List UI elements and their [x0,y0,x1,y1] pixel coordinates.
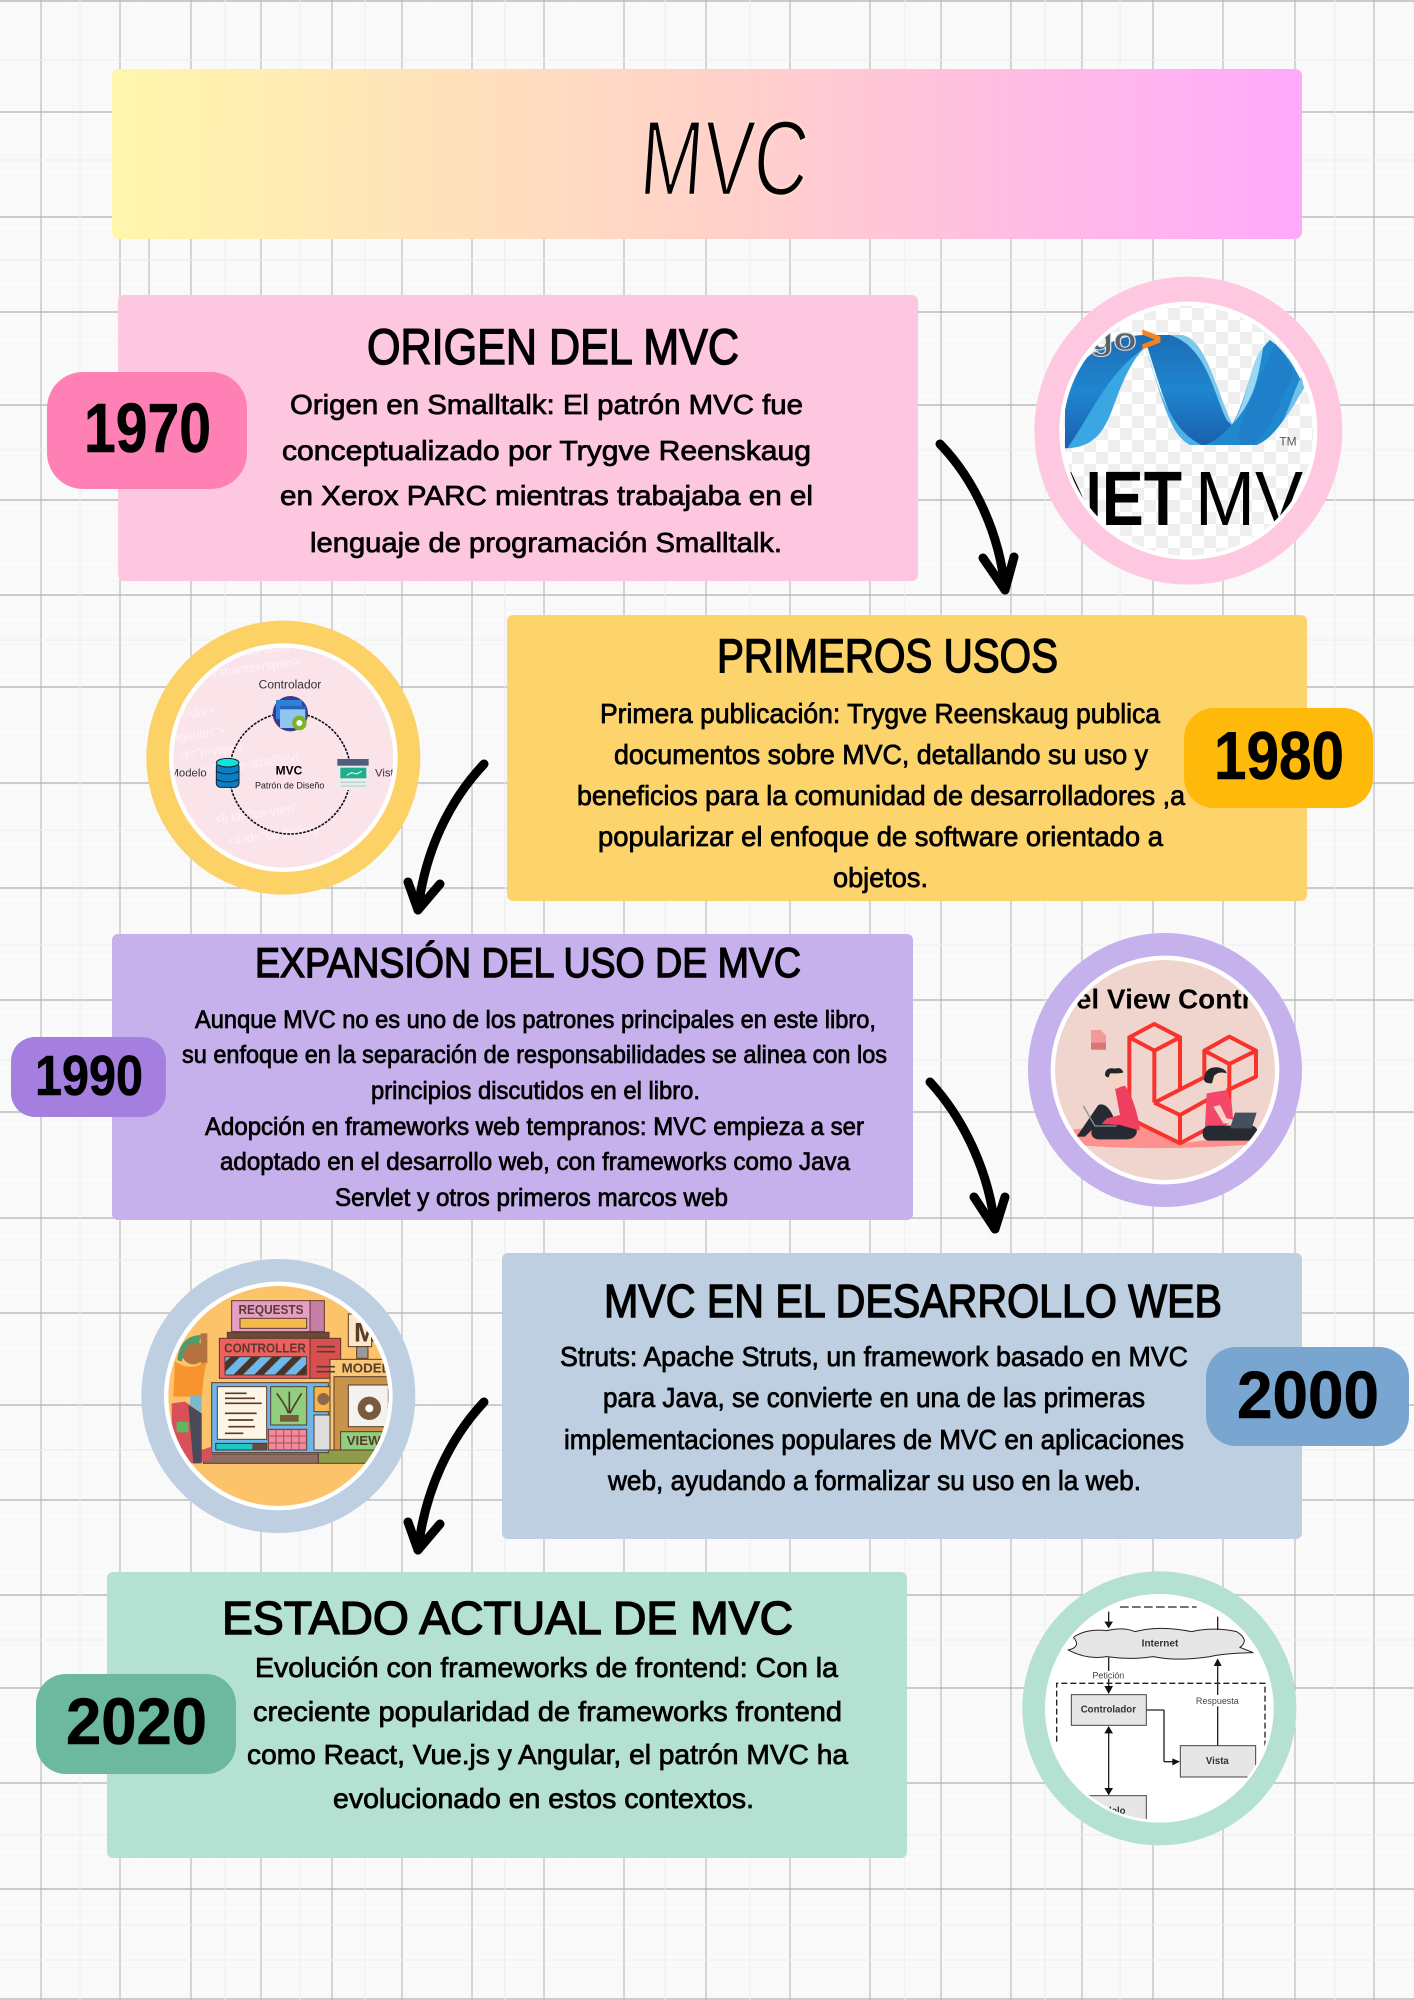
title text: MVC [636,98,813,218]
body text: estado actual: como React, Vue.js y Angular, el patrón MVC ha [247,1739,848,1770]
heading: origen: ORIGEN DEL MVC [367,319,739,375]
body text: desarrollo web: Struts: Apache Struts, un framework basado en MVC [560,1341,1188,1372]
year badge: 1970: 1970 [84,389,211,467]
icon: controller [273,696,308,731]
image: web MVC flow diagram: Internet [1142,1638,1179,1649]
body text: estado actual: Evolución con frameworks de frontend: Con la [255,1652,838,1683]
image: MVC cycle diagram: <li id="ca-history [227,821,322,848]
body text: estado actual: creciente popularidad de frameworks frontend [253,1696,842,1727]
icon: laravel logo [1129,1024,1256,1143]
body text: origen: Origen en Smalltalk: El patrón MVC fue [290,389,803,420]
image: MVC cycle diagram: Patrón de Diseño [255,780,324,790]
image: Laravel MVC illustration: Model View Controller [1018,983,1312,1014]
body text: primeros usos: documentos sobre MVC, detallando su uso y [614,739,1148,770]
icon: database [216,758,239,787]
image: requests controller model view machine: M [354,1318,376,1348]
image: requests controller model view machine: REQUESTS [238,1302,304,1317]
year badge: 2000 [1206,1347,1409,1446]
body text: estado actual: evolucionado en estos contextos. [333,1783,754,1814]
body text: origen: en Xerox PARC mientras trabajaba en el [280,480,813,511]
image: web MVC flow diagram [1022,1571,1296,1845]
heading: estado actual: ESTADO ACTUAL DE MVC [222,1592,793,1644]
image: requests controller model view machine: VIEW [347,1433,381,1448]
image: .NET MVC logo: go [1090,321,1137,357]
body text: desarrollo web [560,1341,1188,1496]
body text: desarrollo web: web, ayudando a formalizar su uso en la web. [607,1465,1141,1496]
body text: primeros usos: objetos. [833,862,928,893]
person: man with laptop [1077,1068,1140,1139]
image: MVC cycle diagram: Vista [375,768,401,780]
arrow: 2000 to 2020 [408,1402,484,1550]
body text: origen: conceptualizado por Trygve Reenskaug [282,435,811,466]
image: MVC cycle diagram: Controlador [259,678,321,692]
image: MVC cycle diagram [146,621,420,895]
heading: expansion: EXPANSIÓN DEL USO DE MVC [255,939,801,986]
person with blocks [172,1333,212,1463]
body text: estado actual [247,1652,848,1814]
year badge: 2020 [36,1674,236,1774]
body text: desarrollo web: para Java, se convierte en una de las primeras [603,1382,1145,1413]
icon: view window [337,759,369,790]
year badge: 1990 [11,1037,166,1117]
body text: expansion: Aunque MVC no es uno de los patrones principales en este libro, [195,1006,876,1034]
body text: primeros usos [577,698,1185,893]
image: MVC cycle diagram: <li id="ca-view" [214,801,300,826]
body text: origen: lenguaje de programación Smalltalk. [310,527,782,558]
body text: primeros usos: Primera publicación: Trygve Reenskaug publica [600,698,1160,729]
image: web MVC flow diagram: Controlador [1081,1705,1136,1716]
body text: origen [280,389,813,558]
image: web MVC flow diagram: Respuesta [1196,1696,1239,1706]
image: MVC cycle diagram: MVC [276,764,303,778]
arrow: 1980 to 1990 [408,764,484,910]
image: MVC cycle diagram: variants-label [214,639,291,663]
body text: expansion: su enfoque en la separación de responsabilidades se alinea con los [182,1041,887,1069]
body text: primeros usos: beneficios para la comunidad de desarrolladores ,a [577,780,1185,811]
image: MVC cycle diagram: </div> [179,703,215,722]
body text: expansion: principios discutidos en el libro. [371,1077,700,1105]
heading: primeros usos: PRIMEROS USOS [717,629,1058,682]
image: .NET MVC logo [1034,277,1355,585]
image: web MVC flow diagram: Petición [1092,1670,1124,1680]
image: .NET MVC logo: MVC [1195,457,1355,542]
year badge: 1980 [1184,708,1373,808]
image: .NET MVC logo: > [1142,322,1161,359]
title banner [112,69,1302,239]
image: MVC cycle diagram: Modelo [170,768,207,780]
person: woman with laptop [1203,1067,1258,1141]
image: MVC cycle diagram: igation"> [175,724,226,744]
year badge: 1980: 1980 [1214,718,1344,794]
panel: origen del MVC [118,295,918,581]
icon: file [1091,1030,1106,1050]
image: .NET MVC logo: TM [1279,435,1297,449]
arrow: 1990 to 2000 [930,1082,1005,1229]
image: requests controller model view machine: MODEL [342,1361,390,1376]
image: .NET MVC logo: NET [1057,457,1182,542]
body text: expansion: Servlet y otros primeros marcos web [335,1184,728,1212]
year badge: 2020: 2020 [66,1684,207,1758]
year badge: 1970 [47,372,247,489]
panel: MVC en el desarrollo web [502,1253,1302,1539]
image: web MVC flow diagram: Modelo [1092,1806,1126,1817]
panel: primeros usos [507,615,1307,901]
image: requests controller model view machine [141,1259,415,1533]
body text: desarrollo web: implementaciones populares de MVC en aplicaciones [564,1424,1184,1455]
year badge: 1990: 1990 [35,1044,143,1108]
body text: expansion: Adopción en frameworks web tempranos: MVC empieza a ser [205,1113,864,1141]
body text: expansion: adoptado en el desarrollo web, con frameworks como Java [220,1148,850,1176]
image: MVC cycle diagram: id="p-views-label">Vi [180,750,300,781]
image: MVC cycle diagram: variants</span> [210,654,301,681]
panel: expansion del uso de MVC [112,934,913,1220]
heading: desarrollo web: MVC EN EL DESARROLLO WEB [604,1275,1222,1327]
image: requests controller model view machine: CONTROLLER [224,1341,306,1356]
image: Laravel MVC illustration [1018,933,1312,1207]
body text: primeros usos: popularizar el enfoque de software orientado a [598,821,1163,852]
image: MVC cycle diagram: id="p-views [178,740,244,762]
arrow: 1970 to 1980 [940,444,1014,590]
year badge: 2000: 2000 [1237,1358,1379,1433]
body text: expansion [182,1006,887,1212]
panel: estado actual de MVC [107,1572,907,1858]
image: web MVC flow diagram: Vista [1206,1756,1229,1767]
